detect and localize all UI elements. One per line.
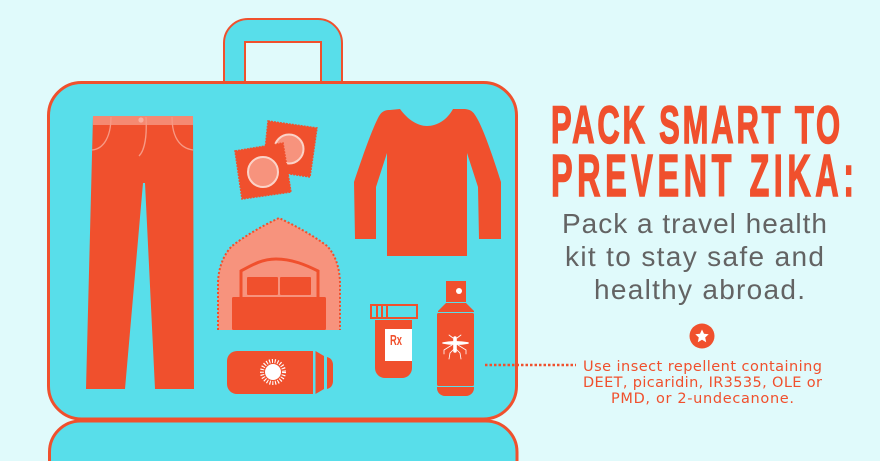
icon: long sleeve shirt xyxy=(354,109,501,256)
suitcase xyxy=(48,19,517,461)
mosquito symbol xyxy=(442,335,468,359)
repellent advice text: Use insect repellent containing xyxy=(583,359,822,375)
title: PREVENT ZIKA: xyxy=(551,144,854,210)
bed headboard xyxy=(241,259,318,298)
subtitle xyxy=(562,208,827,305)
repellent advice text: PMD, or 2-undecanone. xyxy=(611,391,794,407)
subtitle: Pack a travel health xyxy=(562,208,827,239)
pillows xyxy=(247,277,311,295)
sun symbol xyxy=(262,361,284,383)
icon: insect repellent spray xyxy=(437,281,474,396)
subtitle: kit to stay safe and xyxy=(565,241,824,272)
main suitcase body xyxy=(48,82,516,419)
pants waistband xyxy=(93,116,193,125)
prescription label: Rx xyxy=(390,332,402,349)
title xyxy=(551,97,854,210)
front packet xyxy=(235,143,291,199)
spray nozzle xyxy=(446,281,466,302)
lower suitcase shell xyxy=(50,421,517,461)
back packet xyxy=(263,121,317,177)
suitcase handle xyxy=(224,19,342,84)
title: PACK SMART TO xyxy=(551,97,840,155)
icon: pants xyxy=(86,116,194,389)
icon: prescription bottle xyxy=(371,305,417,378)
icon: bed net xyxy=(218,218,340,330)
subtitle: healthy abroad. xyxy=(594,274,805,305)
repellent advice text xyxy=(583,359,822,407)
dotted connector line xyxy=(485,364,576,366)
icon: sunscreen tube xyxy=(227,351,333,394)
mattress xyxy=(232,297,326,330)
icon: condom packets xyxy=(235,121,317,199)
bottle cap xyxy=(371,305,417,318)
bottle body xyxy=(375,320,412,378)
icon: star badge xyxy=(690,324,714,348)
repellent advice text: DEET, picaridin, IR3535, OLE or xyxy=(583,375,822,391)
